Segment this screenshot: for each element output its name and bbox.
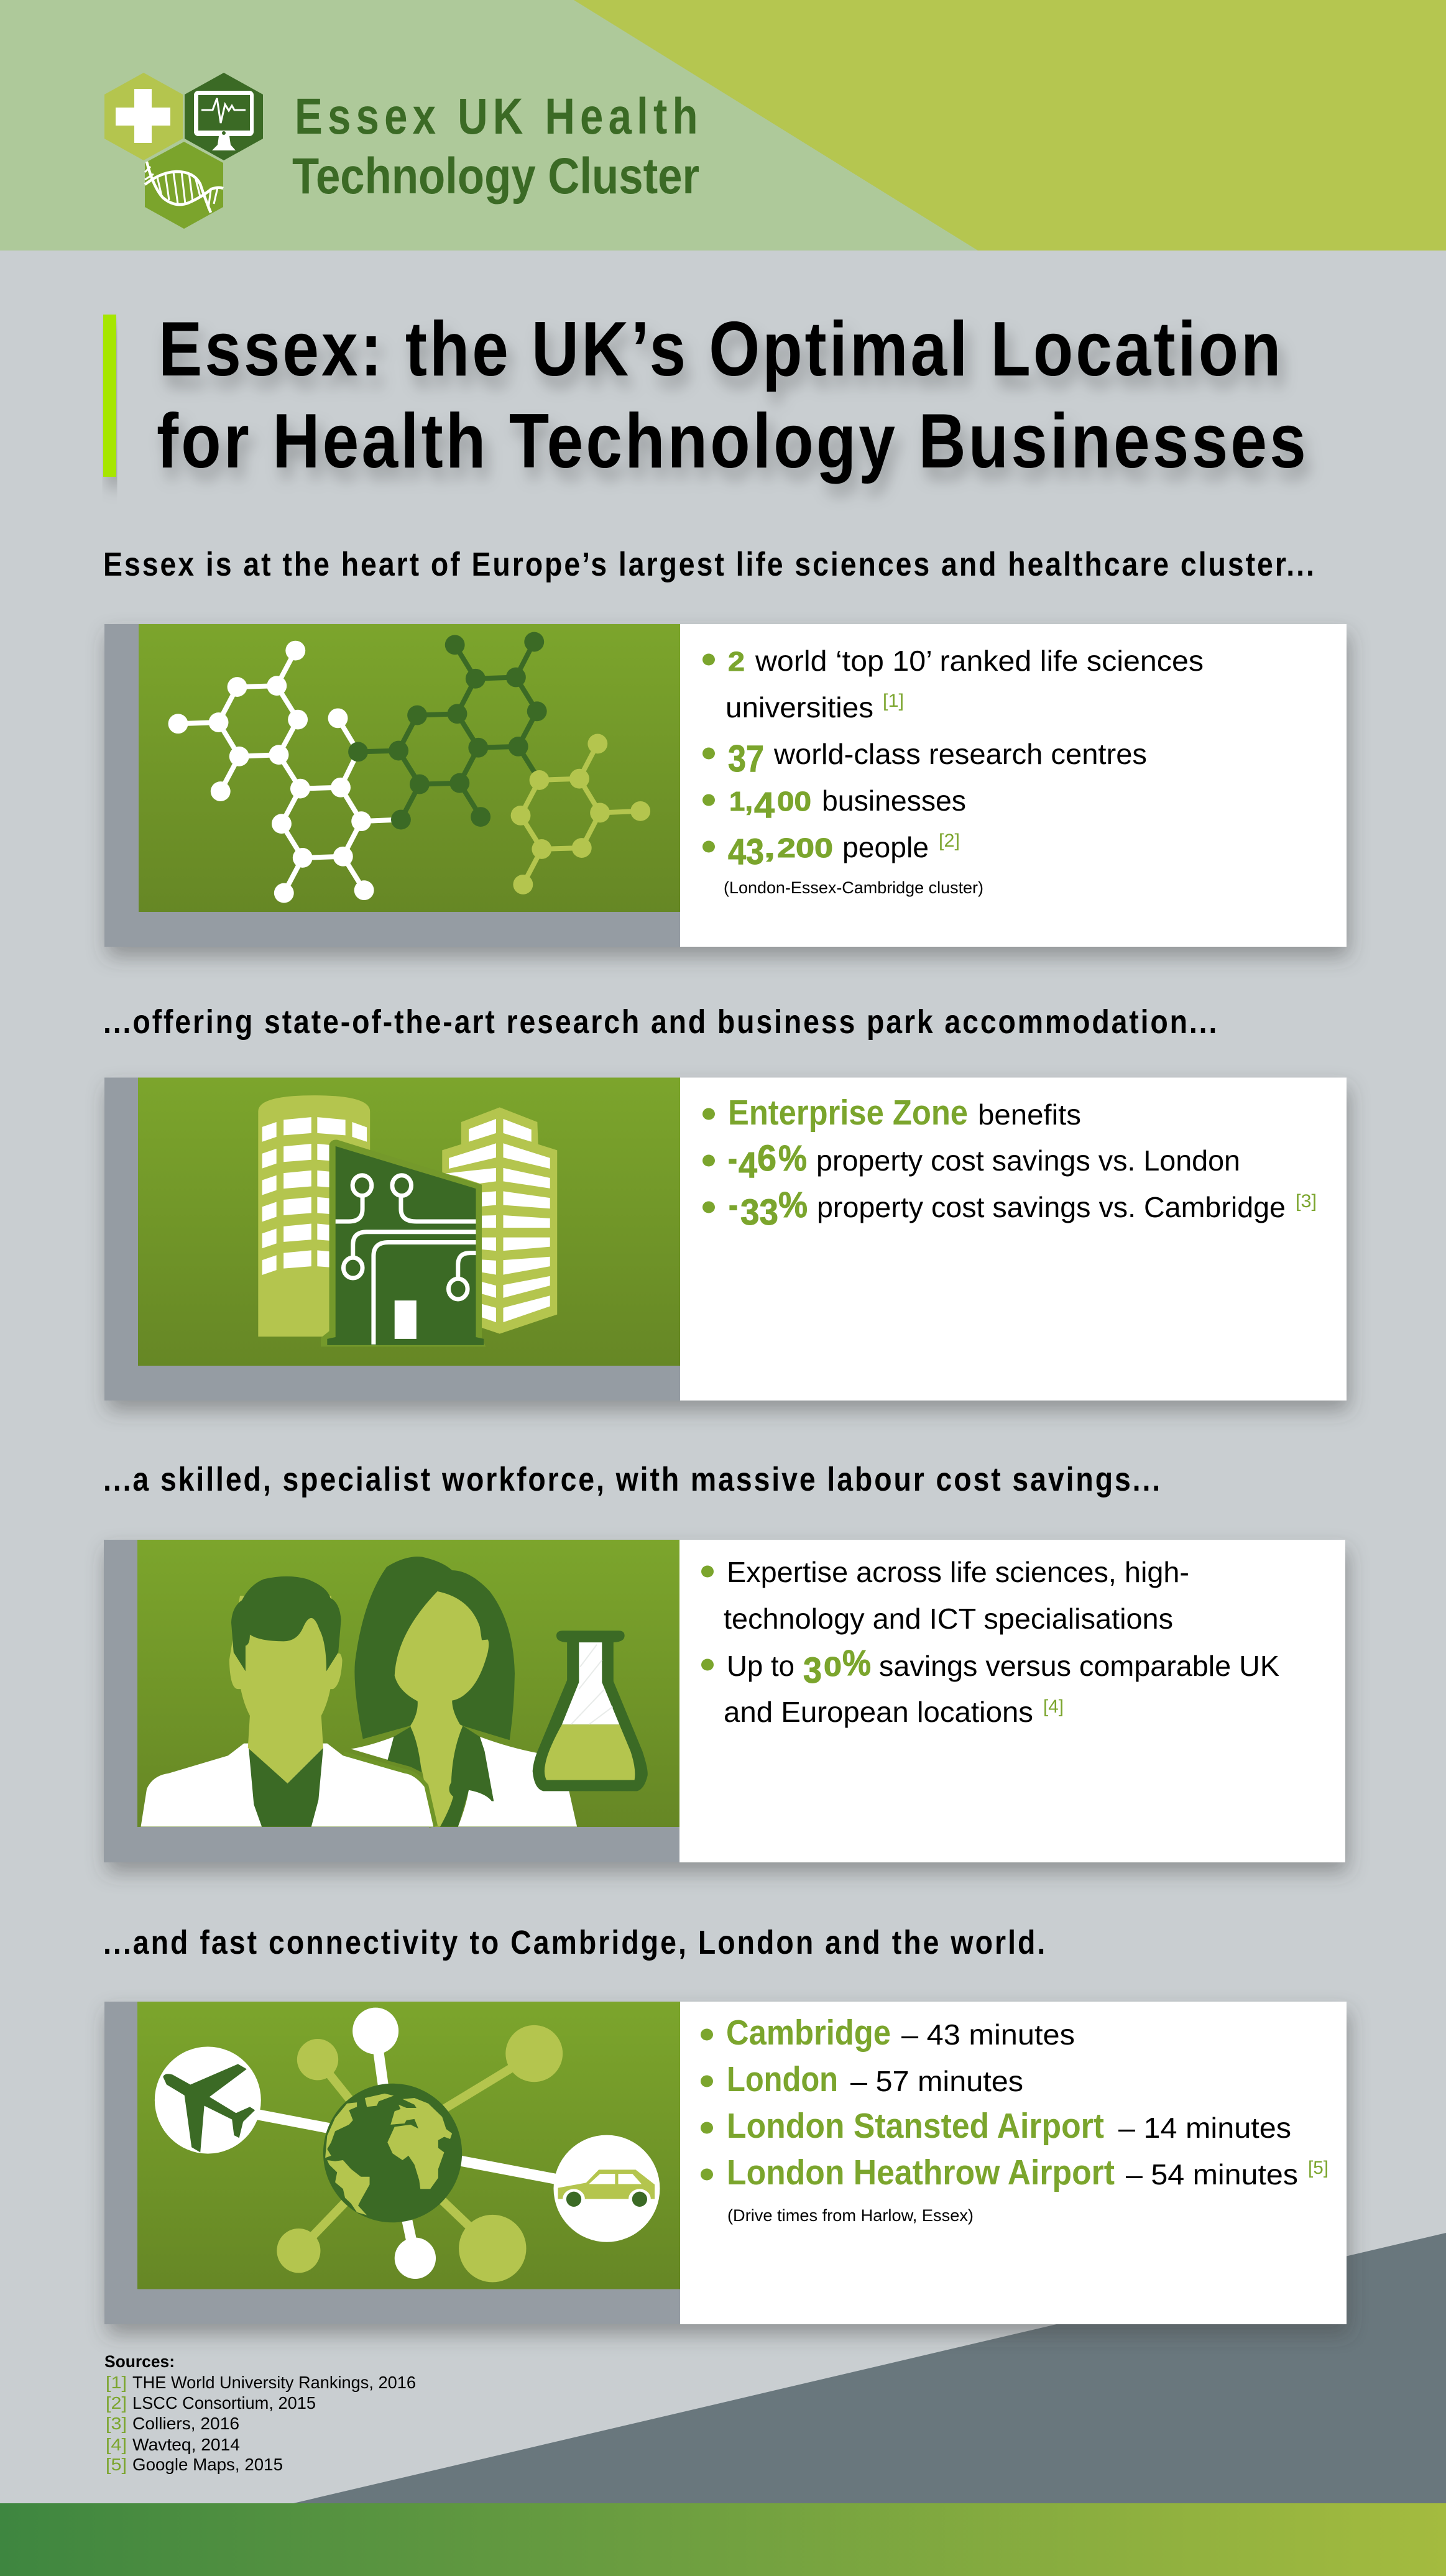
bullet list: Cambridge <box>726 2013 891 2053</box>
icon: monitor hexagon <box>185 73 263 160</box>
bullet list: people <box>842 831 929 863</box>
bullet list: [5] <box>1308 2158 1329 2178</box>
network nodes <box>277 2008 563 2282</box>
icon: car <box>553 2135 660 2242</box>
sources list: [3] <box>106 2414 127 2433</box>
bullet list: [4] <box>1043 1696 1064 1717</box>
footer gradient band <box>0 2503 1446 2576</box>
panel: workforce <box>104 1540 1345 1862</box>
panel: accommodation <box>104 1078 1347 1401</box>
bullet list: 4 <box>739 1145 757 1185</box>
main title <box>103 306 1306 484</box>
bullet list <box>701 2013 1329 2225</box>
title text: for Health Technology Businesses <box>157 398 1306 484</box>
bullet list: - <box>728 1138 737 1179</box>
sources list: LSCC Consortium, 2015 <box>132 2393 316 2413</box>
bullet list: world-class research centres <box>773 738 1147 770</box>
bullet list: savings versus comparable UK <box>879 1650 1279 1682</box>
woman scientist <box>351 1557 577 1827</box>
bullet list: world ‘top 10’ ranked life sciences <box>755 645 1204 677</box>
bullet list: % <box>842 1643 871 1683</box>
sources list: Wavteq, 2014 <box>132 2435 240 2454</box>
panel frame <box>104 1540 1345 1862</box>
bullet list: 43 <box>728 832 764 872</box>
office block <box>442 1107 557 1334</box>
bullet list: % <box>778 1185 808 1225</box>
bullet list: 0 <box>824 1652 842 1682</box>
logo wordmark <box>292 88 699 205</box>
bullet list: % <box>778 1138 807 1179</box>
bullet list: London Stansted Airport <box>727 2106 1104 2146</box>
panel frame <box>104 624 1347 947</box>
image background <box>137 2002 680 2289</box>
logo wordmark: Technology Cluster <box>292 148 699 205</box>
image background <box>139 624 680 912</box>
bullet list <box>701 1556 1279 1728</box>
header band <box>0 0 1446 251</box>
sources list: [2] <box>106 2393 127 2413</box>
bullet list: 4 <box>754 785 775 826</box>
bullet list: Up to <box>727 1650 794 1682</box>
heading: workforce: ...a skilled, specialist workforce, with massive labour cost savings... <box>103 1460 1160 1498</box>
bullet list: technology and ICT specialisations <box>724 1603 1173 1635</box>
icon: globe network <box>155 2008 660 2282</box>
bullet list <box>702 645 1204 897</box>
icon: buildings with circuit <box>258 1095 557 1346</box>
bullet list <box>702 1093 1317 1233</box>
sources list: THE World University Rankings, 2016 <box>132 2373 416 2392</box>
heading: cluster: Essex is at the heart of Europe’s largest life sciences and healthcare cluster... <box>103 545 1314 583</box>
panel: life sciences cluster <box>104 624 1347 947</box>
circuit building <box>321 1139 486 1346</box>
icon: scientists with flask <box>141 1557 648 1827</box>
image background <box>138 1078 680 1366</box>
icon: plane <box>155 2046 261 2154</box>
bullet list: 33 <box>740 1192 778 1233</box>
bullet list: 6 <box>757 1138 776 1179</box>
heading: connectivity: ...and fast connectivity to Cambridge, London and the world. <box>103 1923 1045 1961</box>
bullet list: property cost savings vs. Cambridge <box>817 1191 1286 1223</box>
man scientist <box>141 1576 433 1827</box>
sources list: [4] <box>106 2435 127 2454</box>
bullet list: - <box>729 1185 738 1225</box>
network links <box>208 2031 607 2258</box>
bullet list: 3 <box>803 1650 822 1691</box>
bullet list: – 54 minutes <box>1126 2158 1298 2191</box>
panel frame <box>104 1078 1347 1401</box>
panel: connectivity <box>104 2002 1347 2324</box>
bullet list: (London-Essex-Cambridge cluster) <box>724 878 983 897</box>
bullet list: 00 <box>777 786 811 817</box>
bullet list: [1] <box>883 691 904 711</box>
round tower <box>258 1095 370 1336</box>
bullet list: [2] <box>939 830 960 851</box>
bullet list: – 43 minutes <box>901 2018 1075 2051</box>
sources list: Colliers, 2016 <box>132 2414 239 2433</box>
bullet list: – 57 minutes <box>850 2065 1023 2097</box>
sources list: [1] <box>106 2373 127 2392</box>
flask <box>533 1631 648 1791</box>
logo wordmark: Essex UK Health <box>295 88 698 144</box>
bullet list: 1, <box>729 786 753 817</box>
icon: molecule <box>168 632 650 903</box>
icon: medical cross hexagon <box>104 73 183 160</box>
icon: DNA hexagon <box>143 140 225 231</box>
icon: globe <box>323 2084 462 2222</box>
image background <box>137 1540 679 1827</box>
bullet list: London Heathrow Airport <box>727 2153 1115 2192</box>
bullet list: and European locations <box>724 1696 1033 1728</box>
bullet list: 200 <box>777 833 833 863</box>
bullet list: – 14 minutes <box>1118 2112 1291 2144</box>
logo <box>104 73 699 231</box>
bullet list: , <box>764 833 775 863</box>
sources list: Sources: <box>104 2352 175 2371</box>
bullet list: property cost savings vs. London <box>816 1144 1240 1177</box>
bullet list: businesses <box>822 784 966 817</box>
bullet list: (Drive times from Harlow, Essex) <box>727 2206 974 2225</box>
bullet list: 37 <box>728 738 764 780</box>
sources list: Google Maps, 2015 <box>132 2455 283 2474</box>
bullet list: [3] <box>1296 1191 1317 1212</box>
bullet list: benefits <box>978 1098 1081 1131</box>
bullet list: Expertise across life sciences, high- <box>727 1556 1189 1588</box>
title text: Essex: the UK’s Optimal Location <box>159 306 1281 392</box>
bullet list: London <box>727 2059 838 2099</box>
sources list: [5] <box>106 2455 127 2474</box>
title accent bar <box>103 315 116 477</box>
sources list <box>104 2352 416 2474</box>
bullet list: 2 <box>728 646 745 677</box>
panel frame <box>104 2002 1347 2324</box>
heading: accommodation: ...offering state-of-the-art research and business park accommodation... <box>103 1003 1217 1041</box>
bullet list: Enterprise Zone <box>728 1093 968 1133</box>
bullet list: universities <box>725 691 873 724</box>
footer dark triangle <box>293 2233 1446 2503</box>
title text <box>157 306 1306 484</box>
